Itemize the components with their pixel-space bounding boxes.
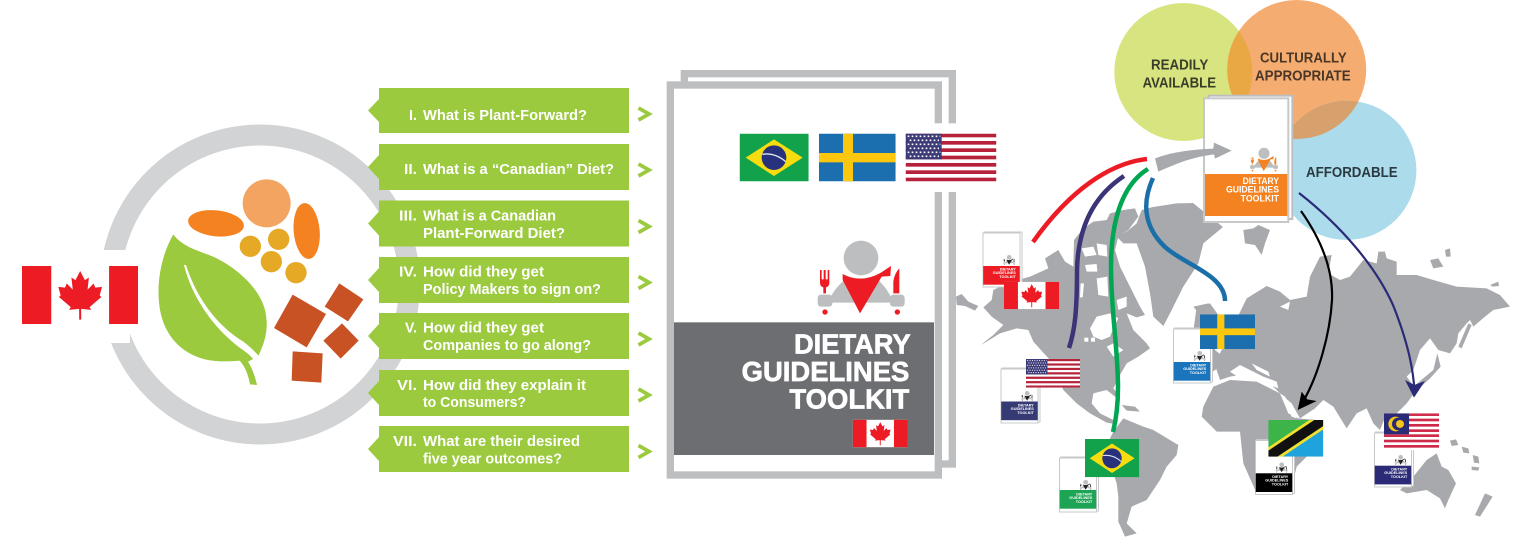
Hudson Bay and inland waters bbox=[1080, 243, 1127, 357]
booklet: Sweden bbox=[1174, 328, 1212, 383]
panel: world map bbox=[956, 203, 1510, 537]
food icons bbox=[159, 179, 363, 385]
panel: plate with leaf and food bbox=[22, 135, 410, 434]
banner III bbox=[368, 200, 629, 246]
orange band bbox=[1205, 174, 1287, 216]
orange band: TOOLKIT bbox=[1241, 193, 1279, 203]
North and South America, Greenland bbox=[956, 203, 1223, 537]
arrow: Canada line bbox=[1033, 159, 1147, 242]
icon: Canada flag bbox=[22, 266, 138, 324]
icon: Brazil flag bbox=[740, 134, 809, 182]
overlap green and orange bbox=[1227, 31, 1252, 95]
front page bbox=[670, 85, 938, 475]
flag: Brazil on map bbox=[1085, 439, 1140, 478]
arrow: grey to toolkit bbox=[1155, 143, 1232, 172]
icon: person with napkin and cutlery bbox=[818, 241, 905, 315]
Venn labels bbox=[1143, 51, 1398, 181]
booklet: Sweden: TOOLKIT bbox=[1190, 370, 1207, 375]
Venn labels: AFFORDABLE bbox=[1306, 165, 1398, 181]
flag: Canada on map bbox=[1004, 282, 1060, 310]
booklet: Canada bbox=[983, 232, 1022, 287]
banner III: III. bbox=[399, 208, 417, 224]
Eurasia, Africa, Australia bbox=[1180, 225, 1510, 517]
orange band: DIETARY bbox=[1243, 176, 1279, 186]
banner VII: five year outcomes? bbox=[423, 452, 562, 468]
banner IV: Policy Makers to sign on? bbox=[423, 282, 601, 298]
arrow: black to Tanzania bbox=[1298, 211, 1332, 410]
banner I bbox=[368, 88, 629, 133]
booklet: Brazil bbox=[1060, 457, 1098, 512]
panel: global toolkit booklet bbox=[1204, 96, 1292, 222]
Venn labels: READILY bbox=[1151, 57, 1209, 73]
banner IV: How did they get bbox=[423, 264, 544, 280]
flag: Malaysia on map bbox=[1384, 413, 1439, 450]
booklet: Sweden: GUIDELINES bbox=[1183, 366, 1207, 371]
overlap orange and blue bbox=[1293, 100, 1358, 139]
booklet: Tanzania: GUIDELINES bbox=[1265, 478, 1289, 483]
booklet: USA: GUIDELINES bbox=[1011, 406, 1034, 411]
banner II: II. bbox=[404, 162, 417, 178]
icon: person bbox=[1250, 148, 1278, 171]
banner V bbox=[368, 313, 629, 359]
booklet: Sweden: DIETARY bbox=[1190, 362, 1207, 368]
booklet: USA: DIETARY bbox=[1018, 402, 1034, 408]
arrow: USA line bbox=[1069, 176, 1124, 348]
arrow: Sweden line bbox=[1146, 178, 1225, 301]
flag: Sweden on map bbox=[1200, 314, 1255, 349]
panel: source arrows bbox=[1033, 159, 1225, 432]
ring gap behind the flag bbox=[92, 250, 130, 343]
panel: large toolkit document bbox=[670, 74, 996, 475]
banner VI: VI. bbox=[397, 378, 417, 394]
title band bbox=[674, 322, 934, 455]
banner III: What is a Canadian bbox=[423, 208, 556, 224]
booklet: Canada: TOOLKIT bbox=[999, 274, 1016, 279]
circle: readily available bbox=[1114, 3, 1252, 141]
banner V: How did they get bbox=[423, 320, 544, 336]
banner II bbox=[368, 144, 629, 190]
banner VII bbox=[368, 426, 629, 472]
back sheet bbox=[1209, 96, 1292, 219]
icon: Sweden flag bbox=[819, 134, 896, 182]
circle: culturally appropriate bbox=[1227, 0, 1366, 139]
flag: Tanzania on map bbox=[1268, 420, 1324, 457]
booklet: Malaysia bbox=[1374, 432, 1414, 487]
booklet: USA bbox=[1001, 368, 1040, 423]
banner VII: What are their desired bbox=[423, 434, 580, 450]
booklet: Canada: DIETARY bbox=[1000, 266, 1016, 272]
banner V: Companies to go along? bbox=[423, 338, 591, 354]
icon: orange legumes and fruit bbox=[187, 179, 322, 283]
banner I: I. bbox=[409, 108, 417, 124]
Venn labels: AVAILABLE bbox=[1143, 75, 1216, 91]
back page bbox=[684, 74, 952, 464]
booklet: Brazil: TOOLKIT bbox=[1076, 499, 1093, 504]
banner V: V. bbox=[405, 320, 417, 336]
booklet: USA: TOOLKIT bbox=[1017, 410, 1034, 415]
Venn labels: CULTURALLY bbox=[1260, 51, 1347, 67]
booklet: Brazil: DIETARY bbox=[1076, 492, 1093, 496]
arrow: Brazil line bbox=[1111, 169, 1148, 432]
chevron arrows bbox=[638, 108, 649, 458]
page break behind flags bbox=[932, 123, 958, 192]
booklet: Tanzania: DIETARY bbox=[1272, 474, 1289, 479]
banner IV: IV. bbox=[399, 264, 417, 280]
front sheet bbox=[1204, 98, 1288, 222]
booklet: Canada: GUIDELINES bbox=[993, 270, 1016, 275]
title band: TOOLKIT bbox=[789, 383, 909, 414]
banner VII: VII. bbox=[393, 434, 417, 450]
booklet: Brazil: GUIDELINES bbox=[1069, 495, 1093, 500]
banner III: Plant-Forward Diet? bbox=[423, 226, 565, 242]
icon: red-brown cubes bbox=[274, 283, 363, 383]
booklet: Malaysia: DIETARY bbox=[1391, 466, 1408, 472]
banner VI: How did they explain it bbox=[423, 378, 586, 394]
banner II: What is a “Canadian” Diet? bbox=[423, 162, 614, 178]
title band: DIETARY bbox=[794, 328, 911, 359]
flag: USA on map bbox=[1026, 359, 1080, 388]
banner VI bbox=[368, 370, 629, 416]
icon: leaf bbox=[159, 234, 267, 385]
panel: question list bbox=[368, 88, 649, 472]
banner IV bbox=[368, 257, 629, 303]
Venn labels: APPROPRIATE bbox=[1255, 69, 1351, 85]
plate ring bbox=[110, 135, 410, 434]
booklet: Malaysia: TOOLKIT bbox=[1391, 474, 1408, 479]
panel: Venn circles bbox=[1114, 0, 1416, 240]
Mediterranean and inland seas bbox=[1230, 302, 1297, 418]
title band: GUIDELINES bbox=[742, 356, 909, 387]
booklet: Tanzania bbox=[1256, 440, 1294, 494]
banner VI: to Consumers? bbox=[423, 395, 526, 411]
icon: USA flag bbox=[906, 134, 996, 182]
booklet: Tanzania: TOOLKIT bbox=[1272, 481, 1289, 486]
orange band: GUIDELINES bbox=[1226, 185, 1279, 195]
circle: affordable bbox=[1277, 101, 1416, 240]
booklet: Malaysia: GUIDELINES bbox=[1384, 470, 1408, 475]
banner I: What is Plant-Forward? bbox=[423, 108, 587, 124]
arrow: navy to Malaysia bbox=[1299, 193, 1425, 398]
